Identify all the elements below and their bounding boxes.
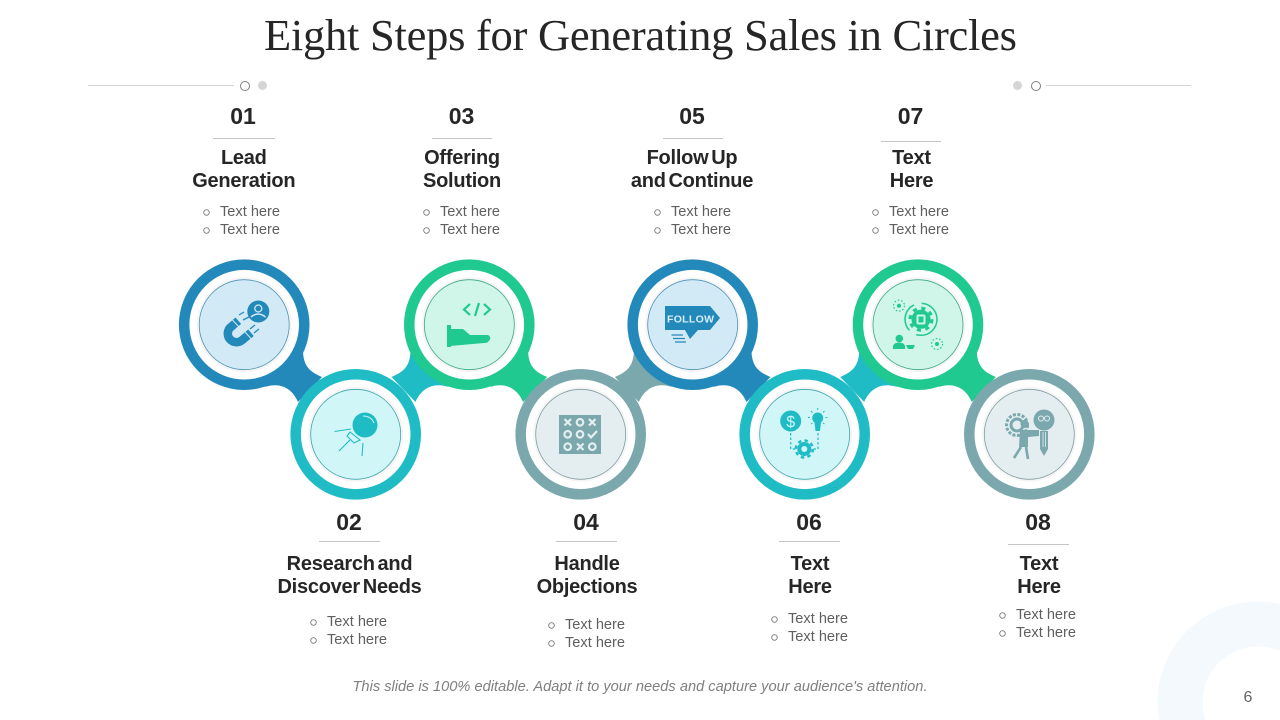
- bullets 08: [1000, 607, 1076, 641]
- bullets 01: Text here: [220, 222, 280, 238]
- bullets 01: Text here: [220, 204, 280, 220]
- step 02 text: [277, 509, 422, 648]
- step 07 text: [873, 103, 949, 238]
- icon: magnet attracting person: [228, 300, 269, 342]
- icon: follow sign: FOLLOW: [667, 314, 714, 326]
- bullets 04: [549, 617, 625, 651]
- heading 02: Research and: [287, 553, 412, 575]
- icon: person with gear, idea and pencil: [1006, 410, 1054, 459]
- footer note: This slide is 100% editable. Adapt it to your needs and capture your audience's attention.: [352, 679, 928, 695]
- bullets 03: [424, 204, 500, 238]
- heading 06: Text: [791, 553, 830, 575]
- icon: tic tac toe board: [559, 415, 601, 454]
- icon: money, idea and gear: $: [786, 414, 795, 431]
- connector 6 to 7: [840, 350, 897, 402]
- heading 07: Here: [890, 170, 933, 192]
- circle 6: [739, 369, 870, 500]
- page number: 6: [1244, 689, 1253, 706]
- heading 07: Text: [892, 147, 931, 169]
- bullets 06: [772, 611, 848, 645]
- heading 07: [890, 147, 933, 192]
- bullets 04: Text here: [565, 617, 625, 633]
- heading 04: Handle: [554, 553, 620, 575]
- heading 01: [192, 147, 295, 192]
- connector 5 to 6: [714, 350, 770, 402]
- number 03: 03: [449, 103, 474, 129]
- heading 05: Follow Up: [647, 147, 737, 169]
- bullets 02: Text here: [327, 632, 387, 648]
- icon: gear cycle with person: [893, 300, 942, 350]
- step 03 text: [423, 103, 501, 238]
- heading 08: Text: [1020, 553, 1059, 575]
- circle 3: [404, 259, 535, 390]
- step 08 text: [1000, 509, 1076, 641]
- heading 04: Objections: [537, 576, 638, 598]
- heading 02: Discover Needs: [277, 576, 422, 598]
- bullets 06: Text here: [788, 629, 848, 645]
- bullets 04: Text here: [565, 635, 625, 651]
- connector 2 to 3: [392, 350, 448, 402]
- title divider left: [88, 81, 267, 90]
- title: Eight Steps for Generating Sales in Circles: [264, 10, 1017, 60]
- heading 05: and Continue: [631, 170, 753, 192]
- step 01 text: [192, 103, 295, 238]
- bullets 02: Text here: [327, 614, 387, 630]
- icon: hand offering code: [447, 303, 490, 347]
- heading 01: Generation: [192, 170, 295, 192]
- number 05: 05: [679, 103, 705, 129]
- number 02: 02: [336, 509, 362, 535]
- step 05 text: [631, 103, 753, 238]
- heading 03: Offering: [424, 147, 500, 169]
- bullets 07: [873, 204, 949, 238]
- bullets 03: Text here: [440, 222, 500, 238]
- step 06 text: [772, 509, 848, 645]
- bullets 05: [655, 204, 731, 238]
- circle 7: [853, 259, 983, 390]
- heading 01: Lead: [221, 147, 267, 169]
- heading 08: [1017, 553, 1061, 598]
- bullets 07: Text here: [889, 222, 949, 238]
- heading 08: Here: [1017, 576, 1061, 598]
- number 01: 01: [230, 103, 256, 129]
- bullets 03: Text here: [440, 204, 500, 220]
- circle 5: [627, 259, 758, 390]
- bullets 07: Text here: [889, 204, 949, 220]
- heading 03: Solution: [423, 170, 501, 192]
- circle 2: [290, 369, 421, 500]
- bullets 01: [204, 204, 280, 238]
- heading 05: [631, 147, 753, 192]
- bullets 06: Text here: [788, 611, 848, 627]
- heading 04: [537, 553, 638, 598]
- connector 4 to 5: [615, 350, 672, 402]
- connector 3 to 4: [490, 350, 547, 402]
- connector 1 to 2: [265, 350, 322, 402]
- number 06: 06: [796, 509, 822, 535]
- number 08: 08: [1025, 509, 1051, 535]
- title divider right: [1013, 81, 1191, 90]
- circle 4: [515, 369, 646, 500]
- number 07: 07: [898, 103, 923, 129]
- heading 06: [788, 553, 832, 598]
- circle 1: [179, 259, 310, 390]
- step 04 text: [537, 509, 638, 651]
- connector 7 to 8: [939, 350, 996, 402]
- bullets 08: Text here: [1016, 607, 1076, 623]
- bullets 05: Text here: [671, 204, 731, 220]
- bullets 05: Text here: [671, 222, 731, 238]
- bullets 02: [311, 614, 387, 648]
- heading 06: Here: [788, 576, 832, 598]
- icon: satellite: [334, 412, 378, 456]
- decorative corner ring: [1157, 602, 1280, 720]
- heading 02: [277, 553, 422, 598]
- bullets 08: Text here: [1016, 625, 1076, 641]
- circle 8: [964, 369, 1095, 500]
- heading 03: [423, 147, 501, 192]
- number 04: 04: [573, 509, 599, 535]
